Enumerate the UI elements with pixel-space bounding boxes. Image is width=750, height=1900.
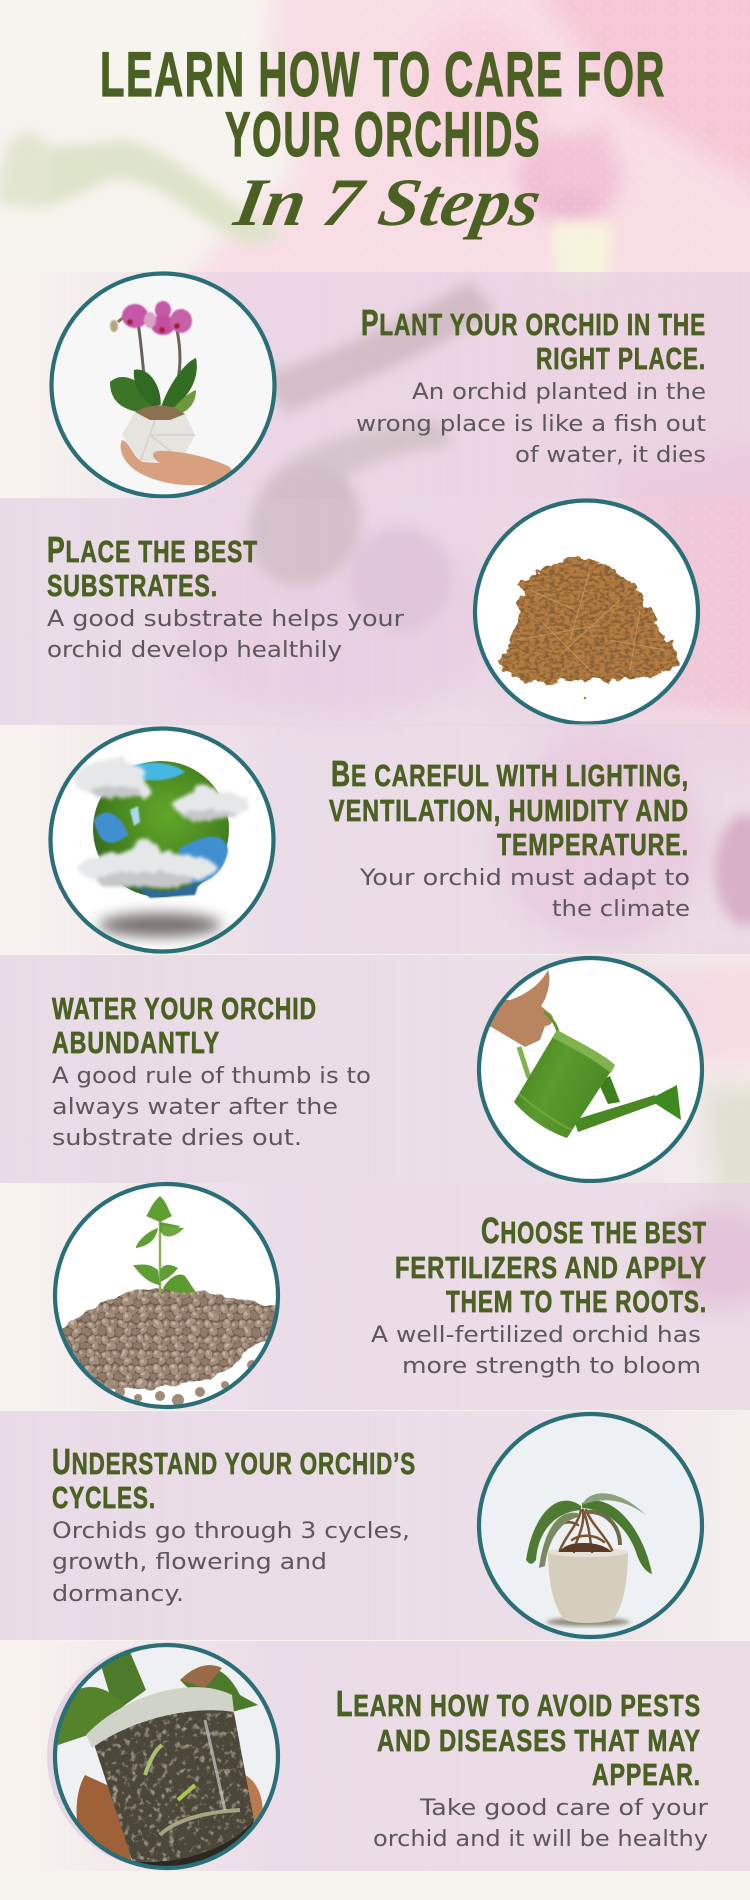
body text [373,1796,709,1852]
heading [52,991,317,1060]
heading [361,302,706,376]
body text [52,1519,410,1607]
heading [329,753,689,862]
body text: wrong place is like a fish out [356,412,706,437]
heading [336,1683,701,1792]
body text [371,1323,701,1379]
step 5 panel [0,1183,750,1410]
body text: the climate [552,897,690,922]
heading: ABUNDANTLY [52,1025,220,1060]
image: hand holding a clear pot with roots [47,1644,278,1880]
heading: APPEAR. [592,1757,701,1792]
heading [52,1441,416,1515]
image: globe with clouds [50,728,274,952]
image: orchid in a white pot held in a hand [51,273,275,497]
heading [47,529,258,603]
body text [356,380,706,468]
step 4 panel [0,955,750,1183]
body text: always water after the [52,1095,338,1120]
image: pile of coconut fibre substrate [474,500,698,724]
body text: orchid and it will be healthy [373,1827,708,1852]
body text: dormancy. [52,1582,184,1607]
body text [52,1064,371,1151]
body text: A well-fertilized orchid has [371,1323,701,1348]
title: YOUR ORCHIDS [225,100,541,170]
body text: Take good care of your [419,1796,709,1821]
body text: more strength to bloom [402,1354,701,1379]
body text [359,866,690,922]
step 2 panel [0,498,750,725]
step 6 panel [0,1411,750,1640]
heading [395,1210,707,1319]
body text: growth, flowering and [52,1550,327,1575]
heading: PLACE THE BEST [47,529,258,570]
body text: orchid develop healthily [47,638,342,663]
step 7 panel [0,1641,750,1880]
heading: SUBSTRATES. [47,568,218,603]
heading: TEMPERATURE. [497,827,689,862]
image: seedling on fertilizer pellets [54,1184,285,1408]
body text: An orchid planted in the [412,380,706,405]
body text: A good substrate helps your [47,607,405,632]
body text: A good rule of thumb is to [52,1064,371,1089]
body text: Orchids go through 3 cycles, [52,1519,410,1544]
title [100,40,666,240]
body text [47,607,405,663]
heading: WATER YOUR ORCHID [52,991,317,1026]
body text: substrate dries out. [52,1126,302,1151]
body text: of water, it dies [515,443,706,468]
step 1 panel [0,272,750,498]
body text: Your orchid must adapt to [359,866,690,891]
image: hand holding a green watering can [478,958,702,1182]
image: orchid in a stone pot [478,1414,702,1638]
step 3 panel [0,724,750,954]
heading: UNDERSTAND YOUR ORCHID’S [52,1441,416,1482]
subtitle: In 7 Steps [228,164,547,240]
heading: CYCLES. [52,1480,156,1515]
